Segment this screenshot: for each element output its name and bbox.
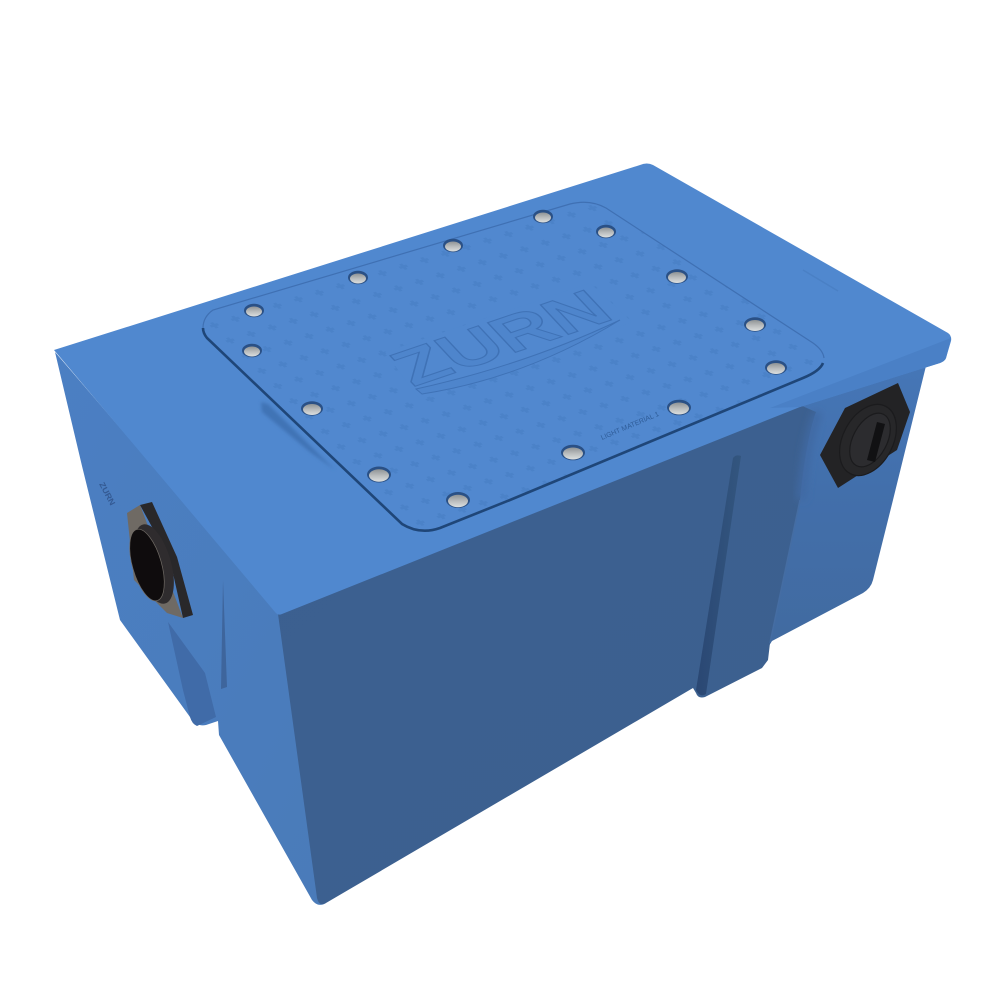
ZURN logo: ZURN xyxy=(377,279,625,396)
pipe hole xyxy=(123,525,171,605)
inspection lid xyxy=(203,202,824,531)
moulded label on left face: ZURN xyxy=(97,480,117,507)
pipe collar xyxy=(126,520,182,608)
tank left side face xyxy=(55,352,326,905)
flange side xyxy=(140,502,193,618)
lid tread pattern xyxy=(203,202,824,531)
logo swoosh xyxy=(416,320,620,394)
lid thin outline upper edges xyxy=(203,202,824,358)
lid small text: LIGHT MATERIAL 1 xyxy=(600,411,660,442)
flange face xyxy=(127,505,183,618)
soft blend into right face xyxy=(801,412,818,500)
left foot notch xyxy=(168,622,216,726)
logo clear zone xyxy=(385,283,632,400)
lid screws xyxy=(242,210,787,508)
plug slot xyxy=(867,422,885,462)
triangular moulded slit xyxy=(221,580,227,689)
rim notch right xyxy=(803,270,838,291)
lid dark gap outline lower edges xyxy=(203,328,823,531)
tank top face with rim xyxy=(54,164,951,615)
front right section edge xyxy=(770,500,800,643)
right black hex plug fitting xyxy=(820,383,910,488)
shadow notch beneath lid left edge xyxy=(261,402,335,470)
left black pipe fitting xyxy=(123,502,193,618)
front rim lip band xyxy=(770,338,951,408)
vertical slot xyxy=(696,455,741,695)
tank front face xyxy=(278,405,818,904)
lid plate xyxy=(203,202,824,531)
tank right side face xyxy=(760,350,930,660)
